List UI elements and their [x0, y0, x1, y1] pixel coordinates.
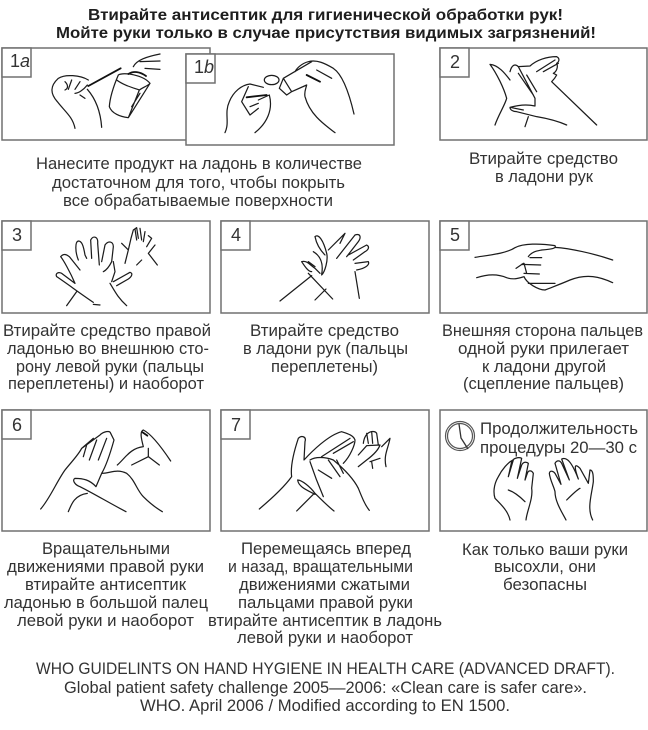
text: final caption	[462, 541, 628, 594]
text: source note: Global patient safety challenge 2005—2006: «Clean care is safer care».	[64, 679, 587, 697]
text: step 2 caption: Втирайте средство	[469, 150, 618, 168]
icon: fingertips on palm	[259, 431, 390, 511]
panel: step 1b: 1b	[194, 57, 214, 77]
text: step 3 caption: рону левой руки (пальцы	[16, 358, 204, 376]
text: step 7 caption	[208, 540, 442, 647]
text: source note	[36, 660, 615, 715]
text: step 4 caption: в ладони рук (пальцы	[243, 340, 408, 358]
title	[56, 7, 596, 42]
text: step 2 caption	[469, 150, 618, 186]
text: step 1 caption: достаточном для того, чтобы покрыть	[52, 174, 345, 192]
icon: hand under dispenser	[52, 54, 160, 128]
text: step 5 caption: одной руки прилегает	[458, 340, 630, 358]
text: step 6 caption: втирайте антисептик	[25, 576, 187, 594]
text: step 7 caption: втирайте антисептик в ладонь	[208, 612, 442, 630]
icon: interlocked fingers	[475, 244, 613, 290]
icon: dry open hands	[494, 458, 593, 520]
text: step 3 caption: Втирайте средство правой	[3, 322, 211, 340]
icon: palm over back of hand	[56, 228, 157, 306]
text: step 7 caption: пальцами правой руки	[238, 594, 413, 612]
text: step 1 caption: все обрабатываемые поверхности	[63, 192, 333, 210]
panel: step 4	[221, 221, 429, 313]
text: step 4 caption: переплетены)	[271, 358, 378, 376]
icon: clock	[446, 422, 474, 450]
title: Мойте руки только в случае присутствия видимых загрязнений!	[56, 25, 596, 42]
panel: step 3	[2, 221, 210, 313]
text: step 7 caption: и назад, вращательными	[228, 558, 413, 576]
panel: step 2: 2	[450, 52, 460, 72]
text: step 6 caption	[4, 540, 209, 630]
text: step 3 caption: ладонью во внешнюю сто-	[7, 340, 209, 358]
panel: step 5	[440, 221, 647, 313]
text: step 3 caption: переплетены) и наоборот	[8, 375, 204, 393]
text: step 7 caption: левой руки и наоборот	[237, 629, 413, 647]
text: step 3 caption	[3, 322, 211, 393]
icon: rubbing thumb	[41, 430, 171, 512]
text: step 1 caption: Нанесите продукт на ладонь в количестве	[36, 155, 362, 173]
panel: step 6	[2, 410, 210, 531]
text: step 6 caption: ладонью в большой палец	[4, 594, 209, 612]
text: step 4 caption	[243, 322, 408, 376]
icon: hands with bottle	[225, 61, 354, 133]
panel: step 2	[440, 48, 647, 140]
panel: step 1a	[2, 48, 210, 140]
text: duration	[480, 420, 638, 457]
panel: step 6: 6	[12, 415, 22, 435]
text: step 4 caption: Втирайте средство	[250, 322, 399, 340]
text: step 5 caption: Внешняя сторона пальцев	[442, 322, 643, 340]
text: step 6 caption: Вращательными	[42, 540, 170, 558]
text: duration: процедуры 20—30 с	[480, 439, 637, 457]
text: final caption: Как только ваши руки	[462, 541, 628, 559]
text: source note: WHO. April 2006 / Modified according to EN 1500.	[140, 697, 510, 715]
text: step 7 caption: движениями сжатыми	[239, 576, 410, 594]
text: final caption: высохли, они	[494, 558, 596, 576]
panel: step 1a: 1a	[10, 51, 30, 71]
icon: interlaced fingers	[280, 233, 369, 301]
panel: step 1b	[186, 54, 394, 145]
text: duration: Продолжительность	[480, 420, 638, 438]
panel: step 7	[221, 410, 429, 531]
text: final caption: безопасны	[503, 576, 587, 594]
text: step 5 caption: (сцепление пальцев)	[463, 375, 624, 393]
icon: palms rubbing	[490, 57, 597, 127]
text: step 7 caption: Перемещаясь вперед	[241, 540, 411, 558]
panel: step 3: 3	[12, 225, 22, 245]
title: Втирайте антисептик для гигиенической обработки рук!	[88, 7, 563, 24]
text: step 6 caption: левой руки и наоборот	[17, 612, 194, 630]
text: source note: WHO GUIDELINTS ON HAND HYGIENE IN HEALTH CARE (ADVANCED DRAFT).	[36, 660, 615, 678]
panel: step 5: 5	[450, 225, 460, 245]
panel: duration	[440, 410, 647, 531]
text: step 6 caption: движениями правой руки	[7, 558, 204, 576]
text: step 2 caption: в ладони рук	[495, 168, 594, 186]
panel: step 4: 4	[231, 225, 241, 245]
text: step 5 caption	[442, 322, 643, 393]
panel: step 7: 7	[231, 415, 241, 435]
text: step 5 caption: к ладони другой	[482, 358, 606, 376]
text: step 1 caption	[36, 155, 362, 210]
